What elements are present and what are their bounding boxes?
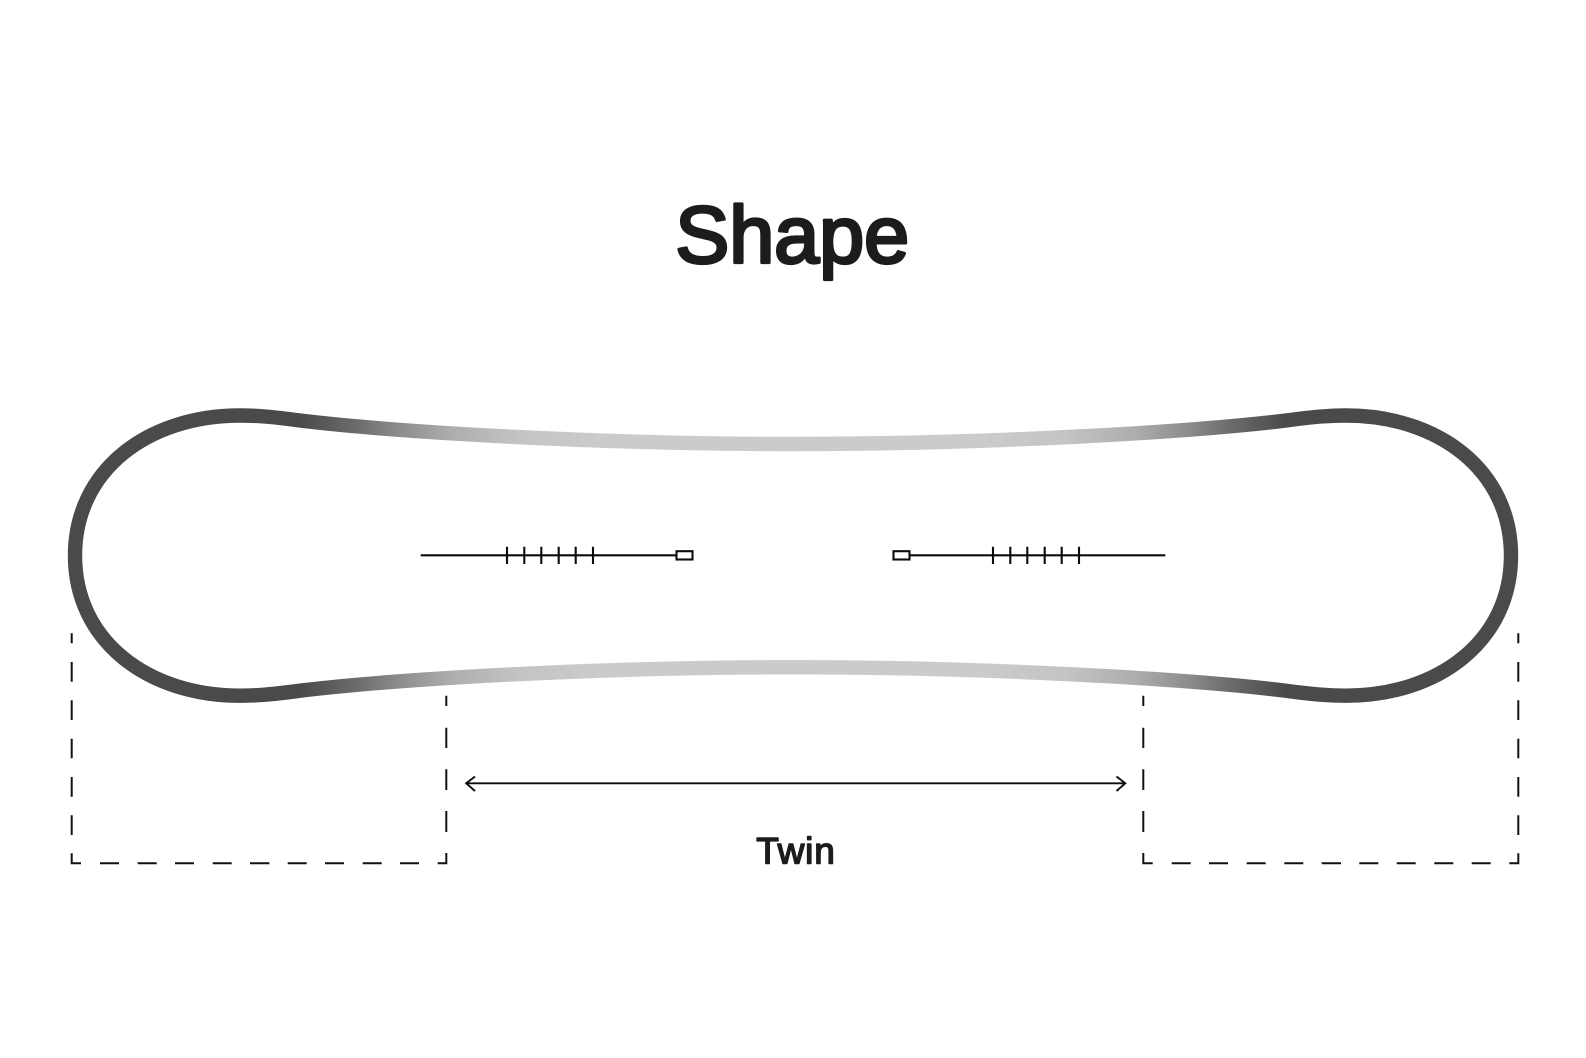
label: Twin: Twin: [756, 831, 836, 872]
snowboard outline: [75, 416, 1511, 696]
left binding inserts: [421, 547, 692, 564]
double-headed arrow: [466, 776, 1126, 791]
title: Shape: [675, 190, 909, 280]
left tip dashed bracket: [72, 633, 446, 863]
right binding inserts: [894, 547, 1165, 564]
right tip dashed bracket: [1143, 633, 1518, 863]
